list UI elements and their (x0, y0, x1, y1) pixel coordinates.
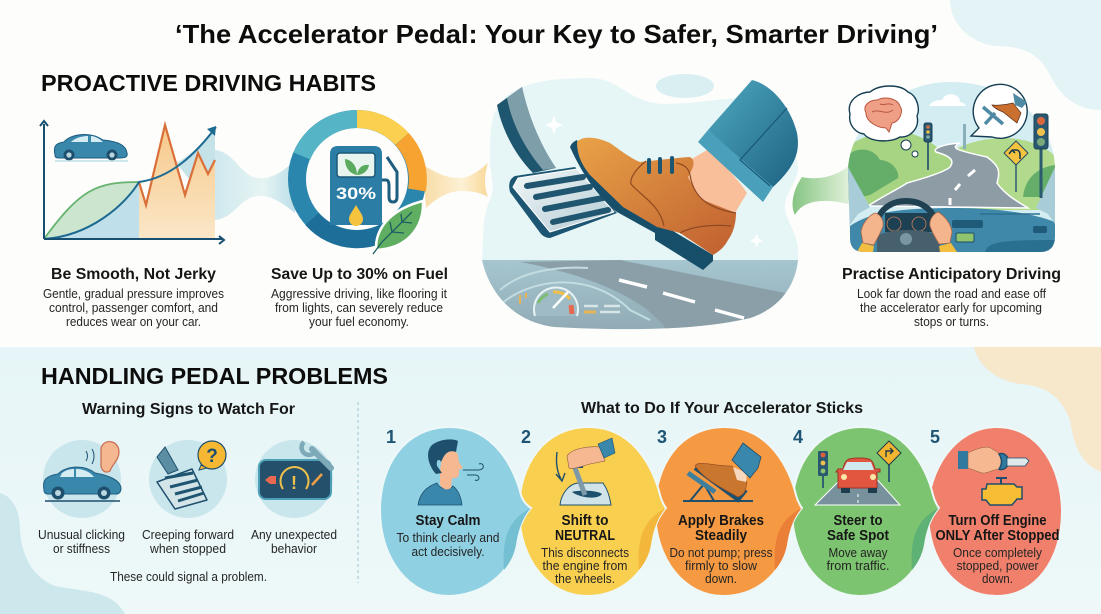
distant sign (963, 124, 966, 149)
jerky area fill (139, 125, 215, 239)
step numbers: 2 (521, 427, 531, 447)
fuel caption (271, 266, 448, 329)
warning 1: car and ear (43, 440, 121, 518)
winding road (868, 143, 1028, 208)
warning 2: pedal and question (149, 440, 227, 518)
icon: foot on brake (683, 484, 753, 501)
title: ‘The Accelerator Pedal: Your Key to Safer, Smarter Driving’ (175, 19, 938, 49)
step 1: To think clearly and (396, 531, 500, 545)
anticipatory caption: the accelerator early for upcoming (860, 301, 1042, 315)
panel: central pedal illustration (480, 74, 800, 335)
step 3: Do not pump; press (670, 546, 772, 560)
warning labels: or stiffness (53, 542, 110, 556)
step 2: the engine from (542, 559, 628, 573)
steps heading: What to Do If Your Accelerator Sticks (581, 400, 863, 417)
step 5: Once completely (953, 546, 1043, 560)
hills (848, 131, 955, 205)
pale cloud (656, 74, 714, 98)
axes (40, 121, 224, 244)
accelerator pedal (509, 167, 617, 238)
icon: car (54, 134, 128, 161)
donut ring (297, 119, 417, 239)
step 5 (928, 427, 1062, 596)
step numbers: 4 (793, 427, 803, 447)
step 3: down. (705, 572, 737, 586)
fuel caption: your fuel economy. (309, 315, 409, 329)
step 4: from traffic. (826, 559, 890, 573)
dashboard (850, 208, 1055, 252)
heading: handling pedal problems: HANDLING PEDAL PROBLEMS (41, 363, 388, 389)
warning labels: Unusual clicking (38, 528, 125, 542)
chart caption: be smooth: reduces wear on your car. (66, 315, 201, 329)
sparkles (545, 115, 763, 248)
panel: warning signs: Warning Signs to Watch For (82, 401, 295, 418)
step 2 (519, 427, 666, 596)
ankle (688, 150, 747, 213)
step 1: Stay Calm (416, 513, 480, 529)
icon: calm person (418, 483, 462, 505)
pedal arm (497, 87, 556, 173)
icon: leaf (373, 201, 423, 254)
orange jerky line (139, 125, 215, 205)
icon: fuel pump: 30% (336, 184, 376, 203)
step 1: act decisively. (412, 545, 484, 559)
chart caption: be smooth: Gentle, gradual pressure improves (43, 287, 224, 301)
warning 3: dashboard and wrench: ! (291, 473, 297, 493)
shoe (570, 138, 736, 270)
sky (848, 82, 1055, 252)
step numbers: 3 (657, 427, 667, 447)
panel: fuel donut (297, 119, 423, 254)
fuel caption: Aggressive driving, like flooring it (271, 287, 448, 301)
road (480, 260, 800, 335)
step 5: down. (982, 572, 1013, 586)
step 4: Steer to (834, 513, 883, 529)
anticipatory caption: Look far down the road and ease off (857, 287, 1046, 301)
icon: key and engine (958, 451, 968, 469)
panel: anticipatory driving scene (848, 82, 1055, 252)
chart caption: be smooth: Be Smooth, Not Jerky (51, 266, 216, 283)
fuel caption: Save Up to 30% on Fuel (271, 266, 448, 283)
step 1 (380, 427, 531, 596)
background blob top right (950, 0, 1101, 110)
warning 2: pedal and question: ? (206, 446, 218, 467)
icon: car on road (815, 475, 900, 505)
warning labels (38, 528, 337, 556)
smooth area fill (44, 182, 139, 239)
background blob bottom left (0, 493, 125, 614)
icon: brain (865, 98, 901, 132)
driver hands (861, 213, 883, 245)
warning labels: behavior (271, 542, 317, 556)
connector green (793, 165, 852, 215)
step 5: stopped, power (956, 559, 1038, 573)
step numbers (386, 427, 940, 447)
connector blue (215, 150, 295, 220)
chart caption: be smooth (43, 266, 224, 329)
step 5: Turn Off Engine (948, 513, 1046, 529)
lower section background (0, 347, 1101, 614)
green smooth curve (44, 182, 139, 239)
step 2: Shift to (562, 513, 609, 529)
scene blob (482, 78, 798, 260)
step 3: Steadily (695, 528, 747, 544)
icon: gear shifter (560, 483, 611, 505)
connector yellow (423, 163, 488, 208)
speech bubble: foot easing off (971, 84, 1027, 138)
step numbers: 5 (930, 427, 940, 447)
anticipatory caption: Practise Anticipatory Driving (842, 266, 1061, 283)
chart caption: be smooth: control, passenger comfort, and (49, 301, 218, 315)
trouser leg (698, 80, 798, 202)
background blob right peach (974, 347, 1101, 472)
step 2: NEUTRAL (555, 528, 615, 544)
icon: wrench (312, 449, 331, 468)
steering wheel (885, 213, 933, 232)
step 4 (792, 427, 939, 596)
dashboard gauge (534, 287, 578, 316)
panel: smooth versus jerky chart (40, 121, 224, 244)
blue rising curve (44, 127, 216, 239)
warning labels: when stopped (149, 542, 226, 556)
step 4: Safe Spot (827, 528, 889, 544)
heading: proactive driving habits: PROACTIVE DRIVING HABITS (41, 70, 376, 96)
step 3 (655, 427, 802, 596)
step 3: firmly to slow (685, 559, 758, 573)
warning 3: dashboard and wrench (255, 440, 333, 518)
fuel caption: from lights, can severely reduce (275, 301, 443, 315)
traffic light right (1034, 114, 1048, 198)
anticipatory caption (842, 266, 1061, 329)
step 4: Move away (828, 546, 888, 560)
warning labels: Any unexpected (251, 528, 337, 542)
step 2: This disconnects (541, 546, 629, 560)
anticipatory caption: stops or turns. (914, 315, 989, 329)
warning note: These could signal a problem. (110, 570, 267, 584)
step numbers: 1 (386, 427, 396, 447)
step 2: the wheels. (555, 572, 615, 586)
curve warning sign (1004, 141, 1028, 192)
panel: steps (380, 400, 1062, 596)
panel: warning signs (38, 401, 337, 584)
step 5: ONLY After Stopped (936, 528, 1060, 544)
warning labels: Creeping forward (142, 528, 234, 542)
thought bubble: brain (849, 86, 918, 157)
step 3: Apply Brakes (678, 513, 764, 529)
traffic light left (924, 123, 932, 170)
